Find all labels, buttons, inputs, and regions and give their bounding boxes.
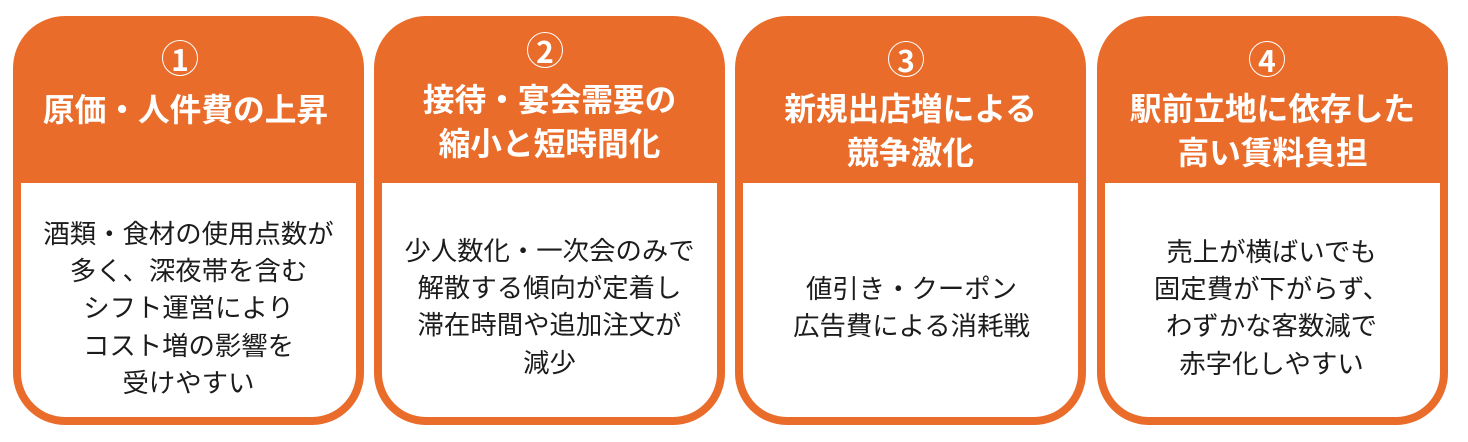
heading 1: 原価・人件費の上昇 <box>43 92 328 128</box>
heading 2 <box>423 82 676 162</box>
text block 4 <box>1154 237 1389 379</box>
body panel 2 <box>382 183 717 417</box>
text block 2: 滞在時間や追加注文が <box>418 310 681 340</box>
heading 3 <box>784 90 1037 171</box>
number 3 <box>888 40 924 76</box>
heading 4: 高い賃料負担 <box>1177 135 1368 171</box>
body panel 1 <box>21 183 356 417</box>
number 1: 1 <box>171 36 189 80</box>
body panel 4 <box>1105 183 1440 417</box>
panel: cause 3 <box>735 16 1086 425</box>
heading 2: 接待・宴会需要の <box>423 82 676 118</box>
heading 4: 駅前立地に依存した <box>1130 90 1415 126</box>
text block 3: 値引き・クーポン <box>806 274 1017 304</box>
heading 3: 競争激化 <box>847 135 974 171</box>
text block 2: 解散する傾向が定着し <box>418 273 681 303</box>
text block 2: 減少 <box>523 348 576 378</box>
text block 1: コスト増の影響を <box>83 331 294 361</box>
heading 3: 新規出店増による <box>784 90 1037 126</box>
text block 2 <box>404 236 695 378</box>
text block 1: 酒類・食材の使用点数が <box>43 219 334 249</box>
panel: cause 2 <box>374 16 725 425</box>
number 2 <box>527 32 563 68</box>
text block 2: 少人数化・一次会のみで <box>404 236 695 266</box>
body panel 3 <box>743 183 1078 417</box>
number 1 <box>162 40 198 76</box>
text block 4: わずかな客数減で <box>1166 311 1377 341</box>
number 4: 4 <box>1258 36 1276 80</box>
panel: cause 4 <box>1097 16 1448 425</box>
text block 1: 多く、深夜帯を含む <box>70 256 307 286</box>
number 2: 2 <box>536 28 554 72</box>
panel: cause 1 <box>13 16 364 425</box>
text block 4: 売上が横ばいでも <box>1166 237 1377 267</box>
text block 4: 赤字化しやすい <box>1179 349 1364 379</box>
text block 3: 広告費による消耗戦 <box>793 311 1030 341</box>
number 3: 3 <box>897 36 915 80</box>
heading 2: 縮小と短時間化 <box>439 126 660 162</box>
text block 1 <box>43 219 334 398</box>
text block 1: シフト運営により <box>83 293 294 323</box>
text block 4: 固定費が下がらず、 <box>1154 274 1389 304</box>
text block 3 <box>793 274 1030 341</box>
number 4 <box>1249 40 1285 76</box>
heading 4 <box>1130 90 1415 171</box>
text block 1: 受けやすい <box>123 368 254 398</box>
